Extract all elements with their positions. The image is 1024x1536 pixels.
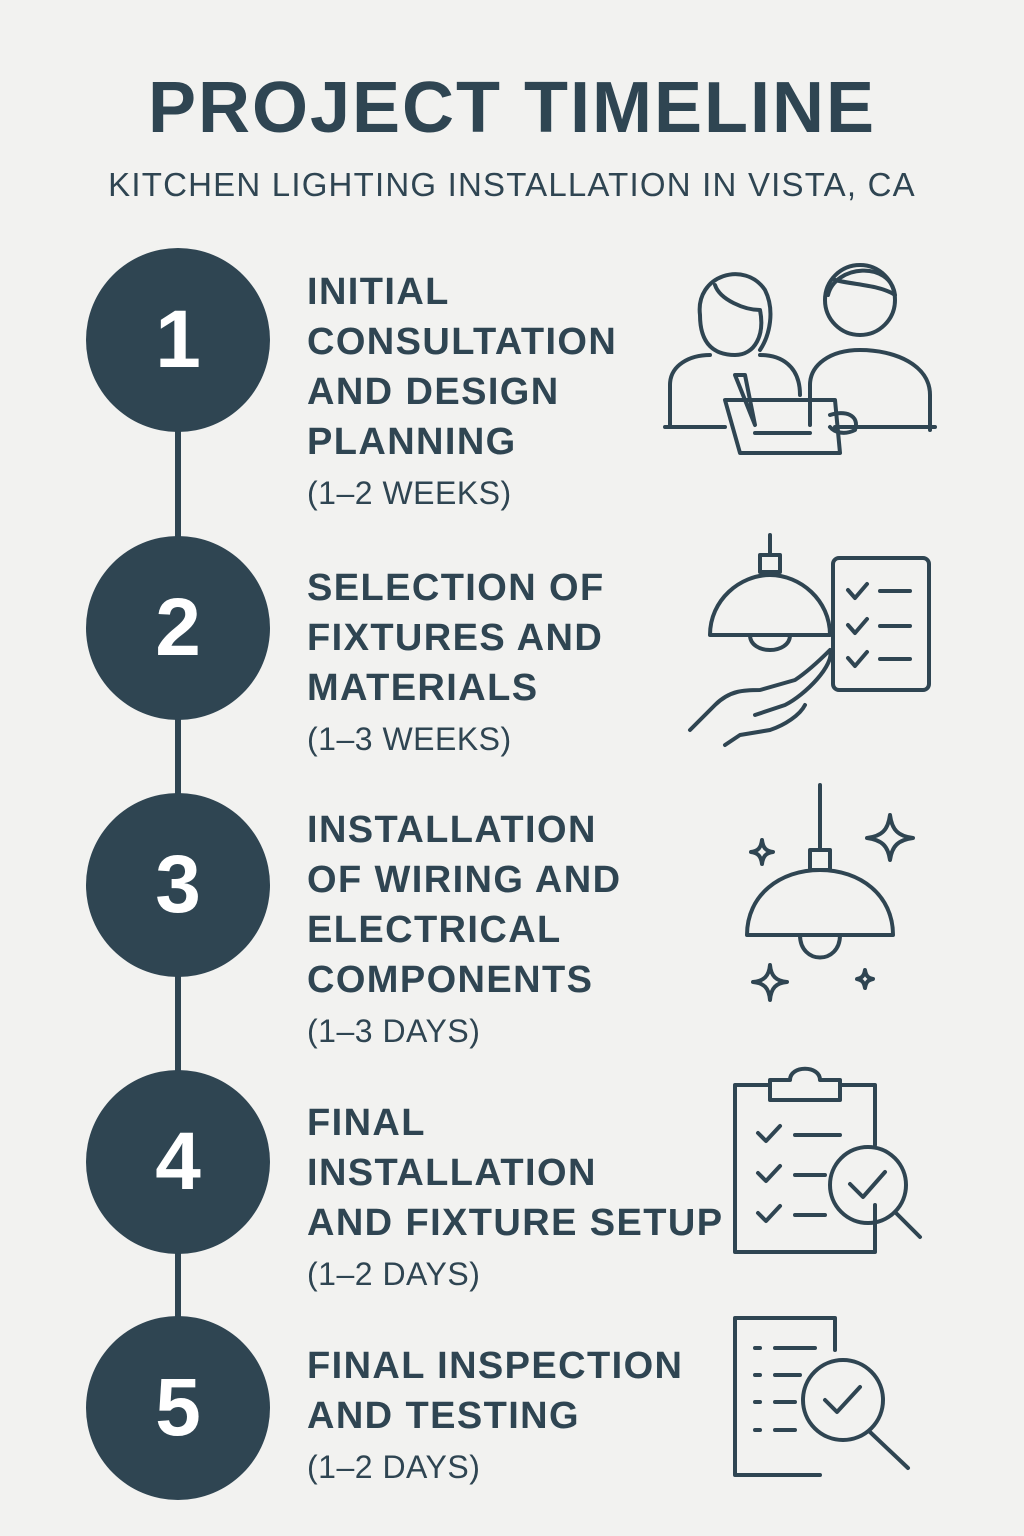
step 4 text: AND FIXTURE SETUP [307,1202,724,1244]
step 2 text: SELECTION OF [307,567,605,609]
step 3 text: COMPONENTS [307,959,593,1001]
circle 1 [86,248,270,432]
circle 4: 4 [155,1116,201,1207]
subtitle: KITCHEN LIGHTING INSTALLATION IN VISTA, CA [108,166,916,203]
icon: clipboard with magnifier [733,1066,922,1254]
step 3 text: (1–3 DAYS) [307,1013,480,1049]
step 2 text: FIXTURES AND [307,617,603,659]
icon: consultation people [663,263,937,455]
step 1 text: CONSULTATION [307,321,617,363]
icon: document with magnifier [733,1316,910,1477]
circle 2 [86,536,270,720]
circle 3: 3 [155,839,201,930]
icon: fixtures selection [688,533,931,748]
step 2 text: (1–3 WEEKS) [307,721,512,757]
title: PROJECT TIMELINE [148,68,876,148]
step 5 text: AND TESTING [307,1395,580,1437]
circle 1: 1 [155,294,201,385]
step 1 text: INITIAL [307,271,450,313]
step 1 text: (1–2 WEEKS) [307,475,512,511]
circle 5 [86,1316,270,1500]
step 1 text: PLANNING [307,421,517,463]
circle 2: 2 [155,582,201,673]
step 1 text [307,271,617,511]
step 4 text: INSTALLATION [307,1152,597,1194]
step 3 text: INSTALLATION [307,809,597,851]
circle 3 [86,793,270,977]
step 3 text [307,809,621,1049]
step 4 text: FINAL [307,1102,426,1144]
step 5 text: FINAL INSPECTION [307,1345,683,1387]
step 1 text: AND DESIGN [307,371,560,413]
step 3 text: ELECTRICAL [307,909,562,951]
circle 4 [86,1070,270,1254]
step 5 text [307,1345,683,1485]
step 4 text [307,1102,724,1292]
step 4 text: (1–2 DAYS) [307,1256,480,1292]
icon: pendant lamp with sparkles [745,783,915,1002]
circle 5: 5 [155,1362,201,1453]
step 5 text: (1–2 DAYS) [307,1449,480,1485]
step 2 text [307,567,605,757]
timeline line [175,340,181,1408]
step 3 text: OF WIRING AND [307,859,621,901]
step 2 text: MATERIALS [307,667,538,709]
